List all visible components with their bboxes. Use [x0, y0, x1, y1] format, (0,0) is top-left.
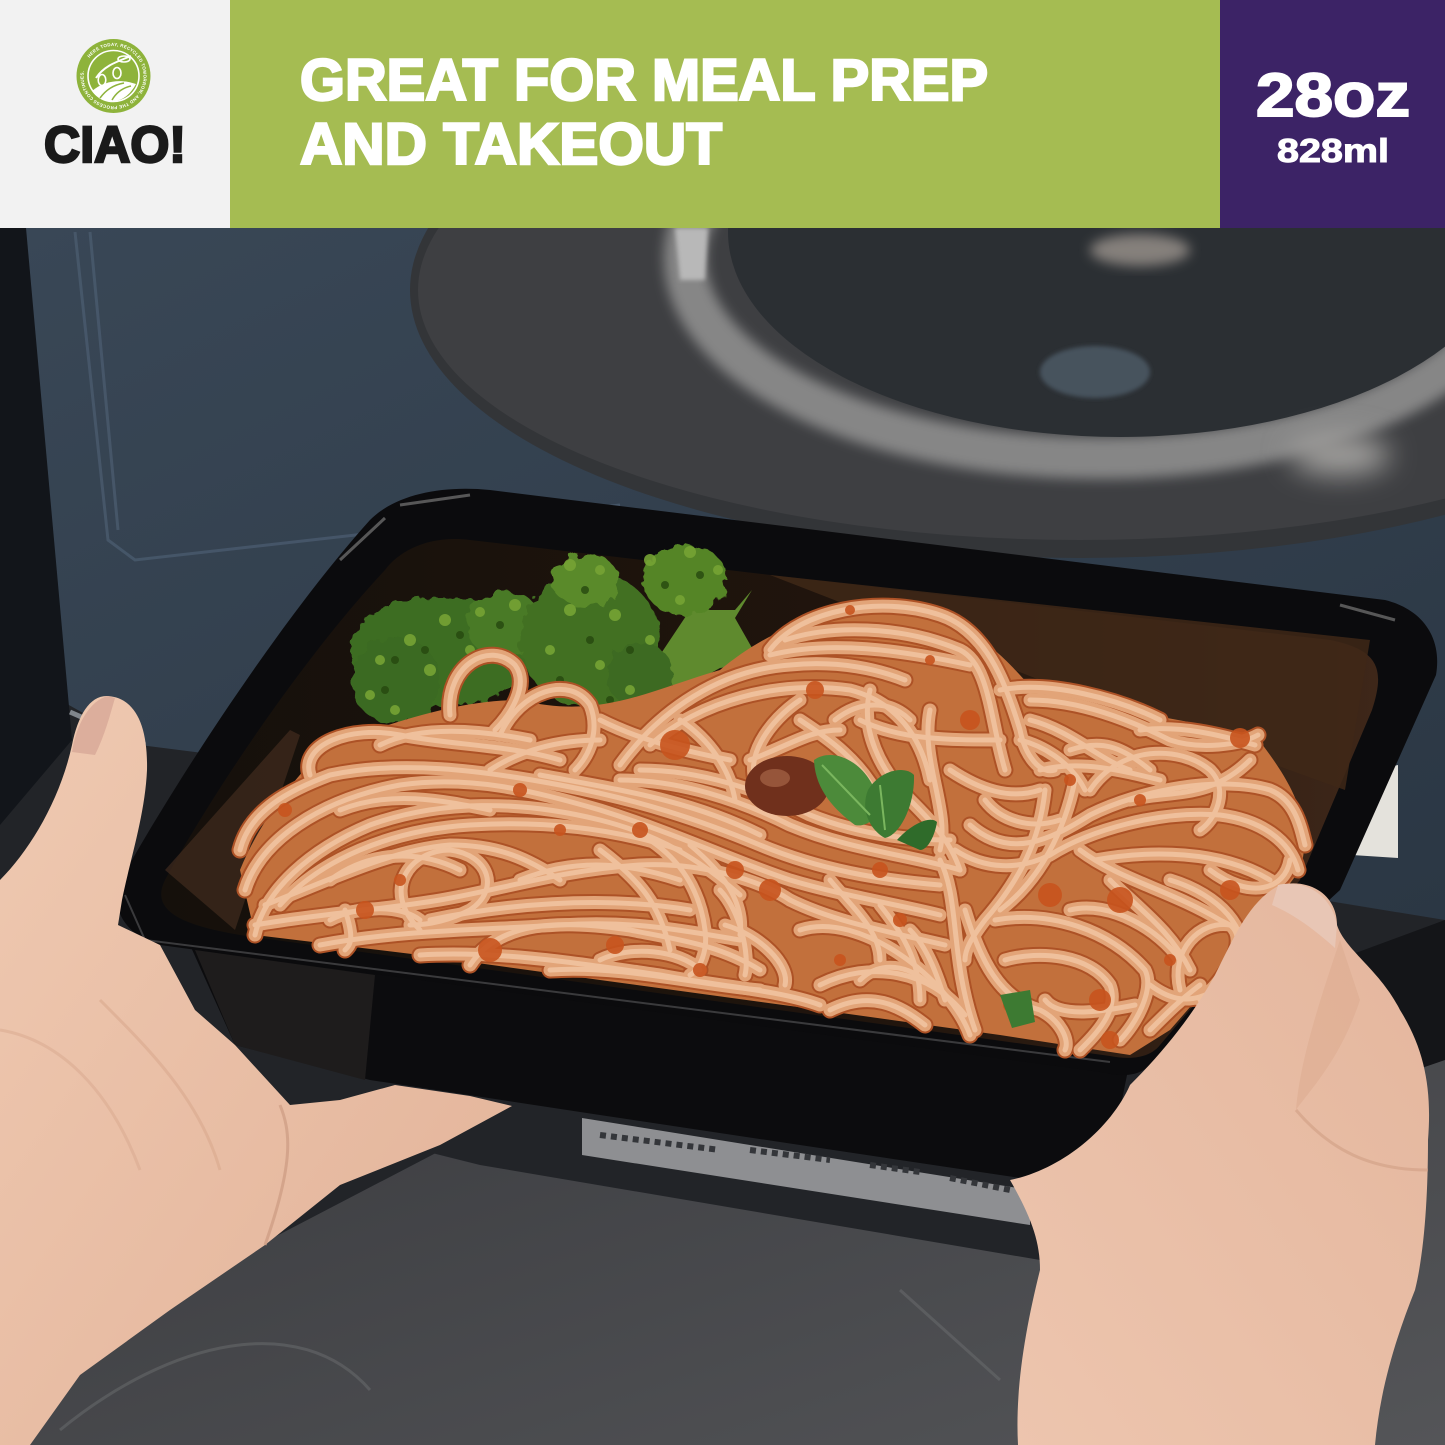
reflection in back wall	[770, 575, 1370, 790]
broccoli	[350, 544, 760, 724]
left door edge	[0, 228, 72, 825]
right hand	[1010, 883, 1429, 1445]
heading text: AND TAKEOUT	[300, 112, 722, 177]
logo wordmark: CIAO!	[44, 116, 186, 173]
wall panel crease	[75, 232, 620, 560]
reflection in left wall	[165, 730, 300, 930]
heading banner	[230, 0, 1220, 228]
food tray	[117, 489, 1437, 1184]
left hand	[0, 696, 512, 1445]
meat and mint garnish	[745, 755, 1035, 1028]
logo emblem: HERE TODAY, RECYCLED TOMORROW, AND THE PROCESS CONTINUES.	[80, 42, 147, 110]
wall sill	[70, 712, 145, 745]
tray rim	[117, 489, 1437, 1075]
microwave control strip	[582, 1118, 1030, 1225]
label sticker on wall	[1352, 765, 1398, 858]
microwave interior wall	[25, 228, 1445, 920]
logo panel	[0, 0, 230, 228]
heading text	[300, 48, 988, 177]
capacity badge	[1220, 0, 1445, 228]
capacity badge: 828ml	[1277, 132, 1389, 169]
capacity badge: 28oz	[1256, 61, 1410, 129]
turntable plate	[410, 22, 1445, 558]
tray front wall	[190, 945, 1130, 1184]
rim highlights	[340, 495, 1395, 620]
sauce flecks	[278, 605, 1250, 1049]
tray inner cavity	[161, 539, 1378, 1058]
heading text: GREAT FOR MEAL PREP	[300, 48, 988, 113]
counter top	[0, 960, 1445, 1445]
dark base under microwave	[300, 1100, 1040, 1260]
spaghetti with meat sauce	[240, 605, 1305, 1055]
